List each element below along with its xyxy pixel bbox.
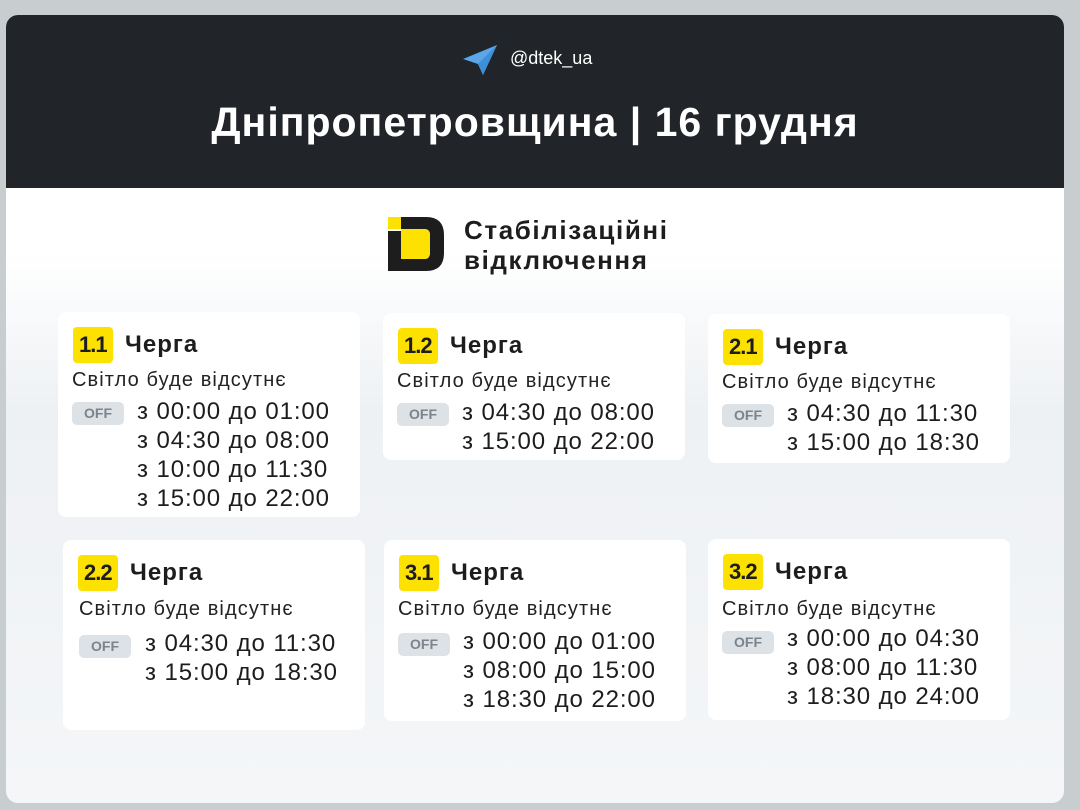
panel: 3.1: з 08:00 до 15:00 — [463, 657, 656, 684]
panel: 3.2: Черга — [775, 558, 848, 585]
panel: 3.1: Черга — [451, 559, 524, 586]
panel: 1.1: OFF — [84, 405, 112, 421]
panel: 3.2: 3.2 — [729, 559, 757, 584]
panel: 3.2: з 18:30 до 24:00 — [787, 683, 980, 710]
panel: 1.1: з 10:00 до 11:30 — [137, 456, 328, 483]
panel: 2.2 — [63, 540, 365, 730]
panel: 2.2: з 15:00 до 18:30 — [145, 659, 338, 686]
panel: 3.1 — [384, 540, 686, 721]
panel: 1.2: OFF — [409, 406, 437, 422]
panel: 2.1: з 15:00 до 18:30 — [787, 429, 980, 456]
panel: 3.2: з 08:00 до 11:30 — [787, 654, 978, 681]
header band — [6, 15, 1064, 188]
panel: 3.1: Світло буде відсутнє — [398, 598, 613, 620]
panel: 1.1: 1.1 — [79, 332, 107, 357]
panel: 3.1: з 18:30 до 22:00 — [463, 686, 656, 713]
panel: 1.2 — [383, 313, 685, 460]
panel: 2.2: OFF — [91, 638, 119, 654]
panel: 1.2: Світло буде відсутнє — [397, 370, 612, 392]
panel: 1.2: з 04:30 до 08:00 — [462, 399, 655, 426]
panel: 1.2: з 15:00 до 22:00 — [462, 428, 655, 455]
panel: 2.2: 2.2 — [84, 560, 112, 585]
title: Дніпропетровщина | 16 грудня — [211, 99, 859, 145]
panel: 1.1: з 00:00 до 01:00 — [137, 398, 330, 425]
panel: 2.2: Світло буде відсутнє — [79, 598, 294, 620]
panel: 2.1: OFF — [734, 407, 762, 423]
panel: 2.1: Черга — [775, 333, 848, 360]
logo text: відключення — [464, 245, 649, 275]
panel: 3.2: OFF — [734, 634, 762, 650]
icon: telegram — [463, 45, 497, 75]
panel: 1.1 — [58, 312, 360, 517]
panel: 1.2: 1.2 — [404, 333, 432, 358]
panel: 2.2: Черга — [130, 559, 203, 586]
logo text: Стабілізаційні — [464, 215, 669, 245]
panel: 1.1: з 15:00 до 22:00 — [137, 485, 330, 512]
panel: 2.1: Світло буде відсутнє — [722, 371, 937, 393]
panel: 1.1: Світло буде відсутнє — [72, 369, 287, 391]
icon: D logo — [388, 217, 444, 271]
panel: 3.1: з 00:00 до 01:00 — [463, 628, 656, 655]
panel: 3.1: OFF — [410, 636, 438, 652]
panel: 2.1 — [708, 314, 1010, 463]
panel: 1.1: з 04:30 до 08:00 — [137, 427, 330, 454]
panel: 3.2: Світло буде відсутнє — [722, 598, 937, 620]
panel: 1.2: Черга — [450, 332, 523, 359]
logo text — [464, 215, 669, 275]
handle text: @dtek_ua — [510, 48, 592, 68]
panel: 2.2: з 04:30 до 11:30 — [145, 630, 336, 657]
panel: 2.1: 2.1 — [729, 334, 757, 359]
panel: 3.2 — [708, 539, 1010, 720]
panel: 1.1: Черга — [125, 331, 198, 358]
panel: 3.2: з 00:00 до 04:30 — [787, 625, 980, 652]
logo block — [388, 215, 669, 275]
panel: 3.1: 3.1 — [405, 560, 433, 585]
panel: 2.1: з 04:30 до 11:30 — [787, 400, 978, 427]
